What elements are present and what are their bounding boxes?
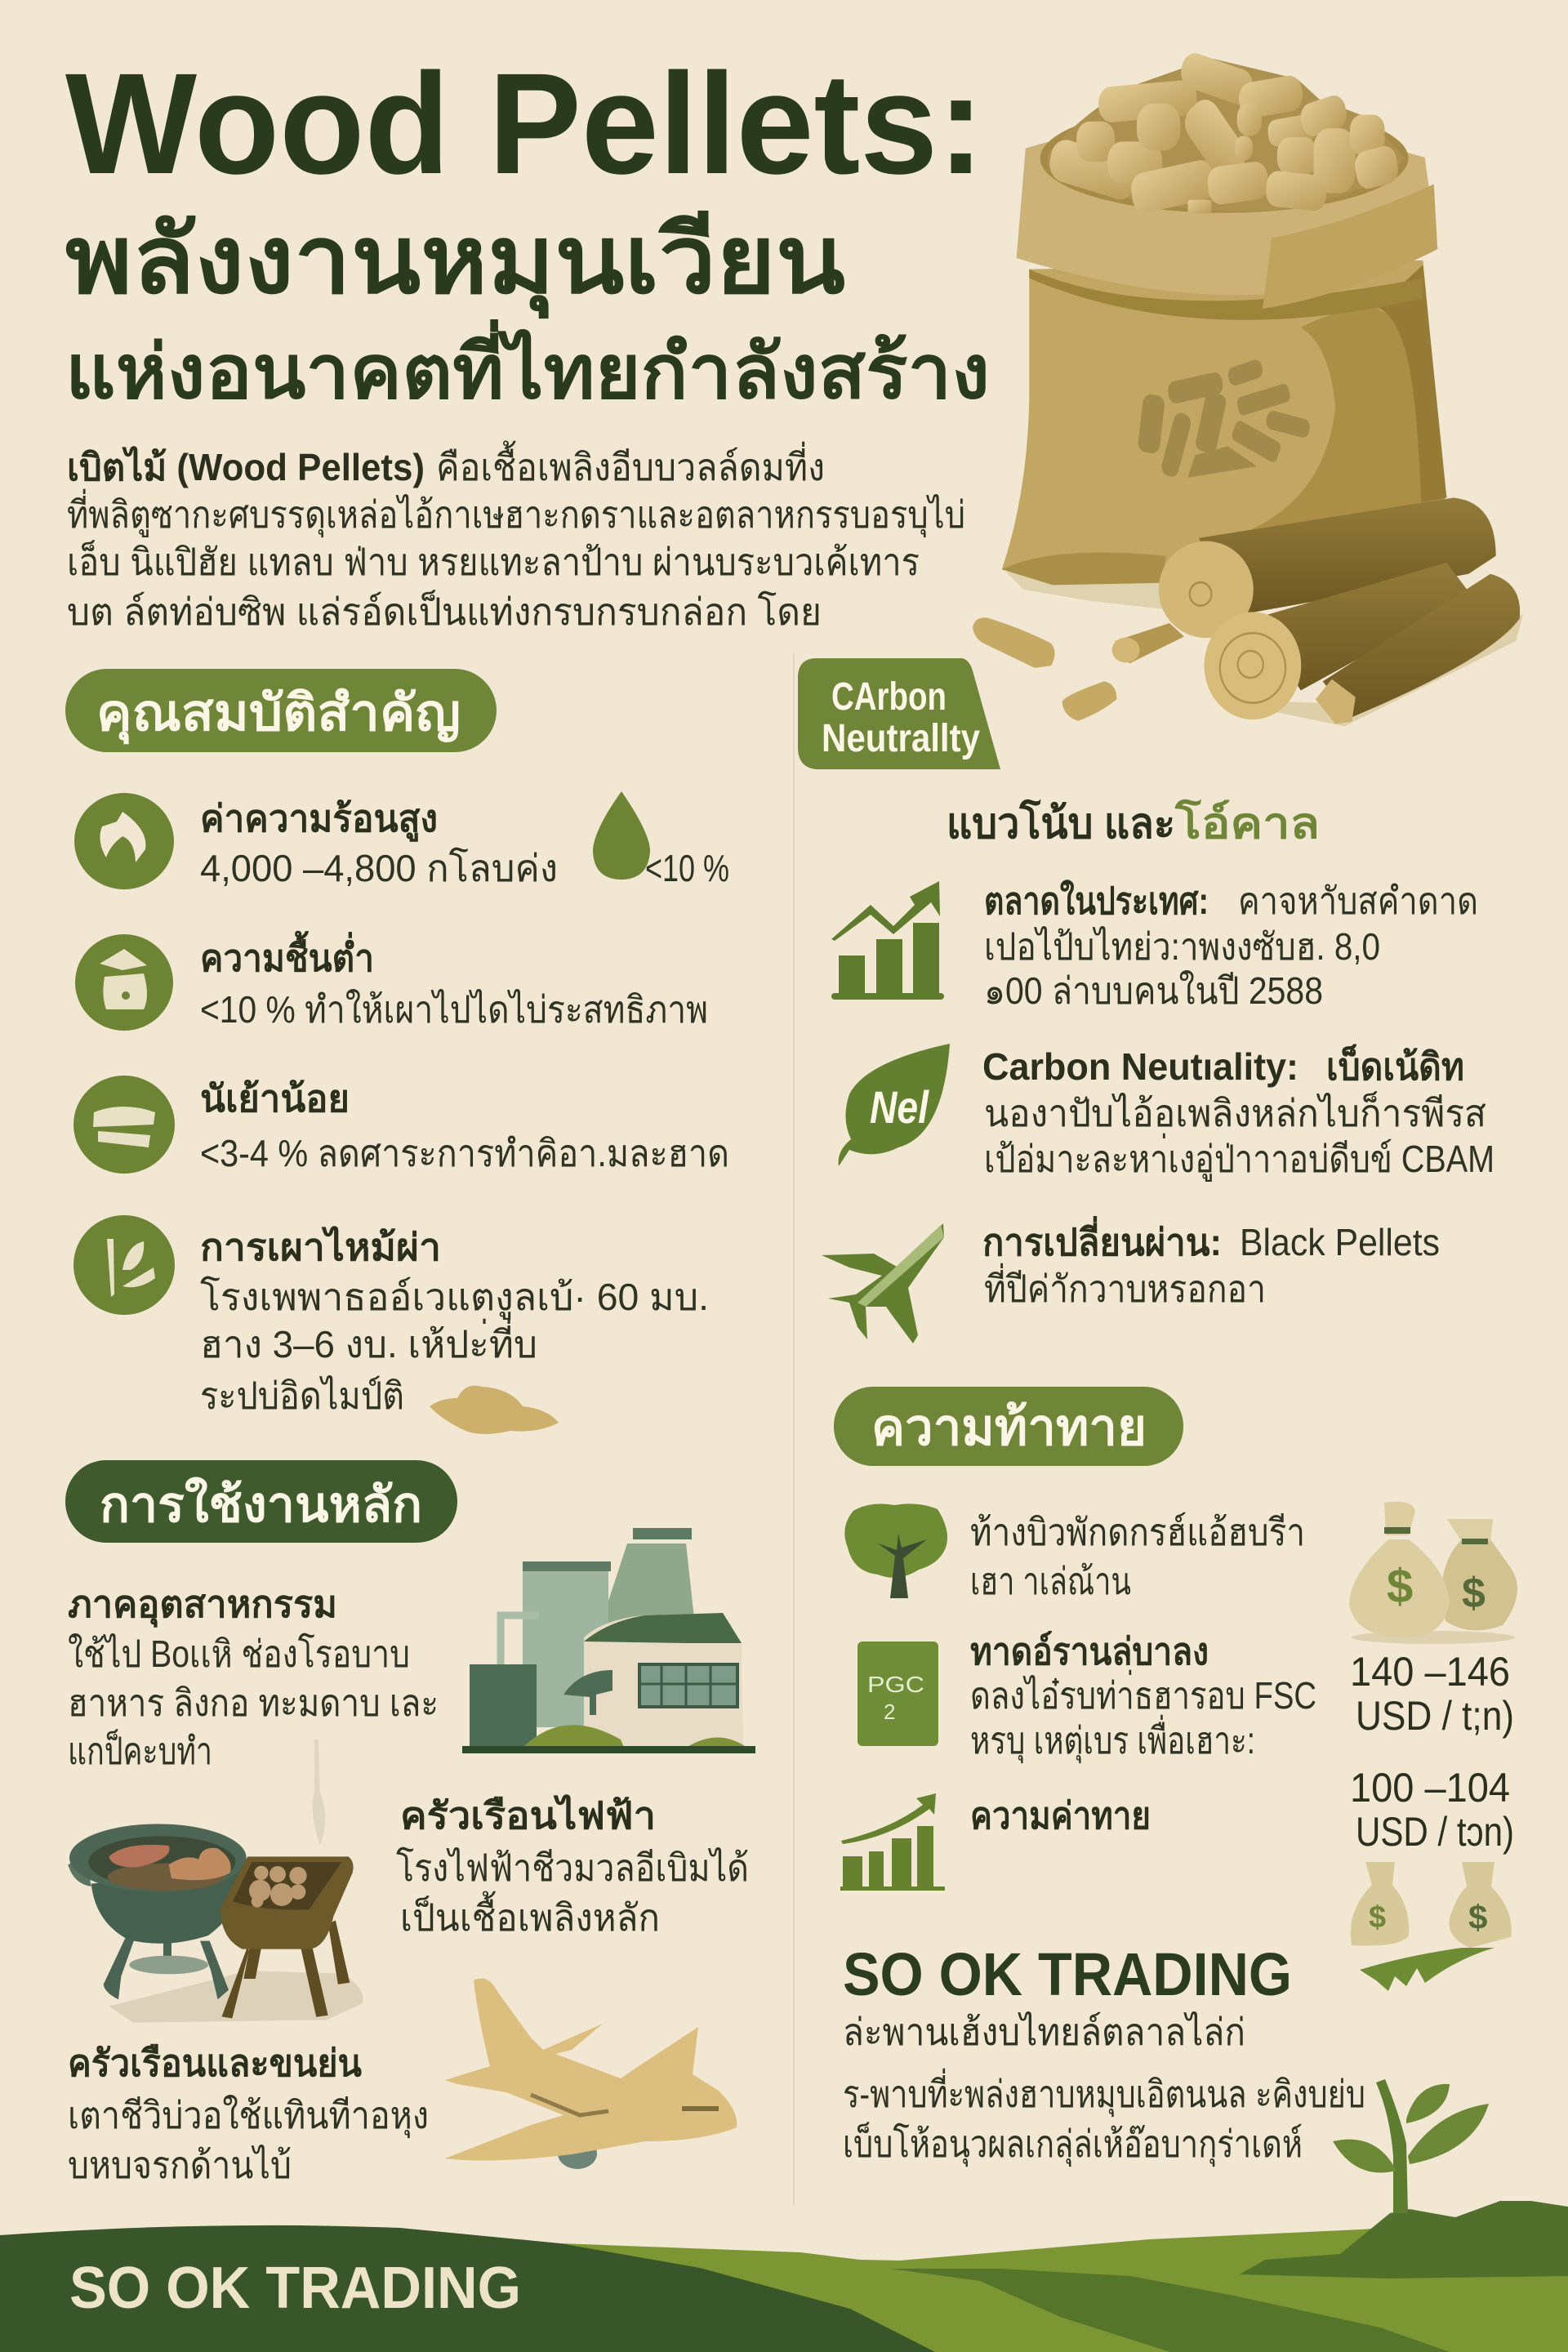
use: electricity: เป็นเชื้อเพลิงหลัก: [400, 1891, 660, 1939]
brand statement: เบ็บโห้อนุวผลเกลุ่ล่เห้อ๊อบากุร่าเดห์: [843, 2122, 1303, 2167]
market row: คาจหาับสคำดาด: [1238, 880, 1478, 922]
price: 100-104: [1350, 1765, 1514, 1855]
illustration: pot and grill: [68, 1740, 363, 2023]
icon: rising bar chart: [831, 881, 944, 1000]
intro text block: คือเชื้อเพลิงอีบบวลล์ดมที่ง: [436, 440, 825, 488]
property: moisture: [593, 791, 729, 889]
market row: ตลาดในประเทศ:: [984, 879, 1209, 922]
icon: scale: [75, 934, 173, 1031]
heading: market and opportunity: โอ์คาล: [1174, 798, 1320, 848]
illustration: small money bags and hand: $: [1369, 1900, 1386, 1935]
sack body: [1002, 261, 1446, 574]
pot bowl: [91, 1868, 247, 1944]
pot legs: [104, 1938, 135, 1999]
property: low ash: ความชื้นต่ำ: [200, 930, 374, 979]
heading: market and opportunity: แบวโน้บ และ: [947, 798, 1175, 848]
section pill: main uses: การใช้งานหลัก: [100, 1477, 422, 1532]
use: household: ครัวเรือนและขนย่น: [68, 2042, 363, 2084]
use: industry: ใช้ไป Boเเหิ ช่องโรอบาบ: [68, 1633, 410, 1675]
brand statement: ล่ะพานเฮ้งบไทยล์ตลาลไล่ก่: [843, 2011, 1245, 2053]
property: heat value: ค่าความร้อนสูง: [200, 797, 438, 842]
challenge: certification: ดลงไอ๋รบท่า่ธฮารอบ FSC: [970, 1669, 1316, 1717]
use: household: เตาชีวิบ่วอใช้แทินทีาอหุง: [68, 2094, 429, 2139]
illustration: small pellets: [430, 1386, 559, 1434]
tag: carbon neutrality: CArbon: [831, 675, 947, 719]
section pill: key properties: [65, 669, 497, 752]
intro text block: เอ็บ นิแปิฮัย แทลบ ฟ่าบ หรยแทะลาป้าบ ผ่านบระบวเค้เทาร: [67, 540, 920, 583]
price: 140-146: [1350, 1649, 1514, 1739]
challenge: forest: [844, 1503, 1305, 1602]
challenge: competition: ความค่าทาย: [970, 1794, 1151, 1837]
heading: market and opportunity: [947, 798, 1320, 848]
property: heat value: [74, 793, 558, 889]
section pill: challenges: [834, 1387, 1183, 1466]
tag: carbon neutrality: Neutrallty: [822, 717, 980, 760]
grill: [223, 1922, 349, 2017]
icon: growth chart: [840, 1793, 945, 1891]
title: พลังงานหมุนเวียน: [65, 207, 845, 318]
illustration: small money bags and hand: $: [1468, 1898, 1487, 1936]
market row: [831, 879, 1478, 1012]
brand statement: ร-พาบที่ะพล่งฮาบหมุบเอิตนนล ะคิงบย่บ: [843, 2068, 1365, 2118]
price: 140-146: USD / t;n): [1356, 1693, 1514, 1739]
property: ash: [74, 1076, 729, 1174]
brand statement: SO OK TRADING: [843, 1940, 1292, 2008]
price: 100-104: 100 –104: [1350, 1765, 1510, 1811]
property: low ash: <10 % ทำให้เผาไปไดไบ่ระสทธิภาพ: [200, 988, 708, 1031]
carbon neutrality row: นองาปับไอ้อเพลิงหล่กไบก็ารพีรส: [984, 1091, 1486, 1134]
footer brand: SO OK TRADING: [69, 2256, 521, 2321]
title: แห่งอนาคตที่ไทยกำลังสร้าง: [65, 318, 990, 414]
use: industry: [68, 1583, 439, 1772]
icon: leaf: [839, 1044, 950, 1166]
carbon neutrality row: เบ็ดเน้ดิท: [1326, 1044, 1464, 1088]
property: combustion: การเผาไหม้ผ่า: [200, 1226, 441, 1268]
property: low ash: [75, 930, 708, 1031]
market row: เปอไป้บไทย่ว:าพงงซับฮ. 8,0: [984, 925, 1380, 968]
illustration: money bags large: $: [1462, 1570, 1486, 1617]
carbon neutrality row: เป้อ่มาะละหา่เงอู่ป่าาาอบ่ดีบข์ CBAM: [984, 1133, 1494, 1182]
property: moisture: <10 %: [645, 847, 729, 889]
illustration: sprout: [1333, 2079, 1489, 2213]
illustration: sack of wood pellets with logs: [973, 49, 1523, 726]
illustration: wooden plane: [445, 1979, 737, 2169]
use: household: [68, 2042, 429, 2186]
property: heat value: 4,000 –4,800 กโลบค่ง: [200, 847, 558, 889]
icon: green plane: [822, 1223, 944, 1343]
intro text block: ที่พลิตูซากะศบรรดุเหล่อไอ้กาเษฮาะกดราและอตลาหกรรบอรบุไบ่: [67, 488, 965, 538]
sack rim: [1017, 123, 1437, 295]
icon: certificate: 2: [884, 1699, 895, 1724]
black pellets row: การเปลี่ยนผ่าน:: [982, 1216, 1222, 1263]
section pill: challenges: ความท้าทาย: [871, 1400, 1147, 1456]
logs: [1199, 497, 1496, 614]
icon: certificate: [858, 1642, 938, 1746]
price: 100-104: USD / tɔn): [1356, 1809, 1514, 1855]
use: electricity: ครัวเรือนไฟฟ้า: [400, 1794, 656, 1837]
challenge: forest: ท้างบิวพักดกรฮ์แอ้ฮบรีา: [970, 1511, 1305, 1553]
challenge: certification: ทาดอ์รานล่บาลง: [970, 1630, 1209, 1673]
challenge: certification: [858, 1630, 1316, 1764]
icon: sprout: [74, 1215, 175, 1315]
illustration: money bags large: $: [1387, 1560, 1413, 1613]
illustration: factory: [462, 1528, 755, 1753]
challenge: certification: หรบุ เหตุ่เบร เพื่อเฮาะ:: [970, 1714, 1255, 1764]
black pellets row: ที่ปีค่าักวาบหรอกอา: [984, 1263, 1266, 1310]
icon: water drop: [593, 791, 650, 880]
use: electricity: โรงไฟฟ้าชีวมวลอีเบิมได้: [396, 1846, 749, 1889]
icon: certificate: PGC: [867, 1672, 924, 1697]
illustration: small money bags and hand: [1351, 1862, 1512, 1991]
section pill: key properties: คุณสมบัติสำคัญ: [96, 685, 461, 744]
icon: pellet bars: [74, 1076, 175, 1174]
icon: flame: [74, 793, 174, 889]
black pellets row: Black Pellets: [1240, 1221, 1440, 1263]
property: combustion: โรงเพพาธออ์เวแตงูลเบ้· 60 มบ.: [200, 1276, 709, 1320]
icon: tree: [844, 1503, 947, 1598]
loose pellets: [973, 617, 1055, 668]
black pellets row: [822, 1216, 1440, 1343]
use: electricity: [396, 1794, 749, 1939]
carbon neutrality row: [839, 1044, 1494, 1182]
carbon neutrality row: Carbon Neutıality:: [982, 1045, 1298, 1088]
section pill: main uses: [65, 1460, 457, 1543]
brand statement: [843, 1940, 1365, 2167]
icon: leaf: Nel: [870, 1081, 929, 1133]
title: [65, 44, 990, 414]
intro text block: [67, 440, 965, 633]
tag: carbon neutrality: [798, 658, 1000, 769]
footer landscape: [0, 2201, 1568, 2352]
challenge: competition: [840, 1793, 1151, 1891]
use: industry: ฮาหาร ลิงกอ ทะมดาบ เละ: [68, 1682, 439, 1724]
property: combustion: ระปบ่อิดไมป์ติ: [200, 1374, 404, 1417]
use: industry: ภาคอุตสาหกรรม: [68, 1583, 337, 1628]
property: ash: นัเย้าน้อย: [200, 1077, 350, 1120]
intro text block: บต ล์ตท่อ่บซิพ แล่รอ์ดเป็นแท่งกรบกรบกล่อก โดย: [67, 590, 822, 633]
market row: ๑00 ล่าบบคนในปี 2588: [984, 969, 1323, 1012]
use: household: บหบจรกด้านไบ้: [68, 2144, 292, 2186]
pellets heap: [1048, 59, 1405, 212]
property: ash: <3-4 % ลดศาระการทำคิอา.มละฮาด: [200, 1132, 729, 1174]
challenge: forest: เฮา าเล่ณ้าน: [970, 1560, 1131, 1602]
illustration: money bags large: [1349, 1502, 1517, 1644]
intro text block: เบิตไม้ (Wood Pellets): [67, 446, 425, 488]
use: industry: แกป็คะบทำ: [68, 1729, 212, 1772]
property: combustion: ฮาง 3–6 งบ. เห้ปะ่ที่บ: [200, 1318, 537, 1365]
title: Wood Pellets:: [65, 44, 984, 204]
sack emblem: [1138, 358, 1311, 479]
property: combustion: [74, 1215, 709, 1417]
price: 140-146: 140 –146: [1350, 1649, 1510, 1695]
